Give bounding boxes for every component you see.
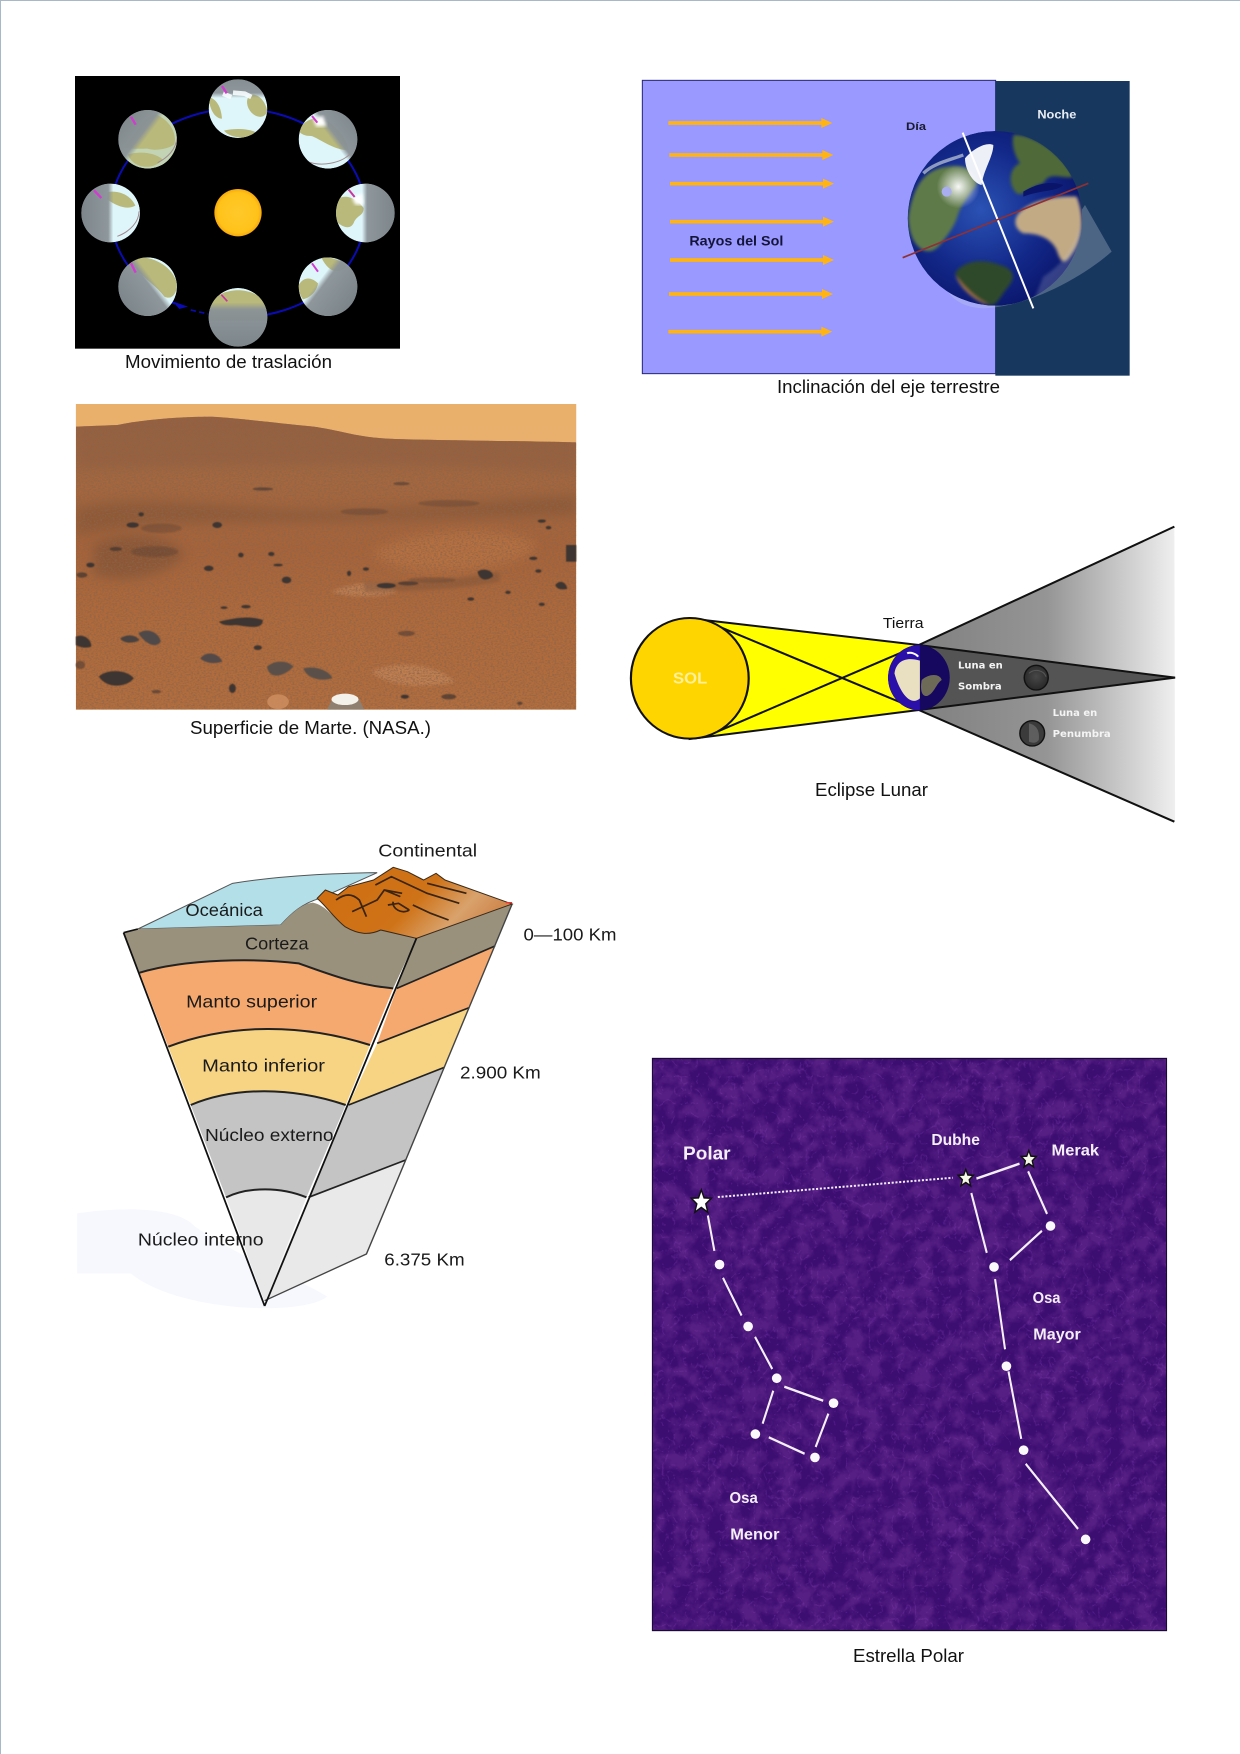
panel: inclinacion del eje terrestre: [642, 80, 1130, 397]
icon: earth: [888, 643, 953, 712]
label: polar: Polar: [683, 1142, 731, 1164]
icon: dubhe star: [958, 1169, 973, 1186]
globe left: [81, 184, 140, 242]
moon in penumbra: [1020, 721, 1045, 746]
label: corteza: Corteza: [245, 934, 309, 953]
photo: martian landscape: [76, 404, 576, 710]
icon: sun: [631, 618, 749, 739]
layer: crust: [124, 903, 416, 988]
panel: eclipse lunar: [631, 527, 1175, 822]
ocean surface: [138, 873, 377, 929]
moon in umbra: [1024, 665, 1048, 690]
label: oceanica: Oceánica: [185, 901, 263, 920]
label: merak: Merak: [1052, 1141, 1100, 1160]
label: rayos del sol: Rayos del Sol: [689, 232, 783, 248]
icon: earth globe: [908, 131, 1090, 310]
light wedge behind earth: [947, 205, 1112, 308]
label: nucleo interno: Núcleo interno: [138, 1230, 264, 1250]
label: depth 2900 km: 2.900 Km: [460, 1063, 541, 1082]
label: continental: Continental: [378, 841, 477, 861]
equator line: [903, 183, 1088, 258]
globe bottom: [208, 288, 268, 347]
star map: [652, 1058, 1167, 1631]
constellation lines: [708, 1164, 1078, 1529]
orbit diagram: [75, 61, 400, 353]
caption: movimiento de traslacion: Movimiento de traslación: [125, 352, 332, 372]
label: dubhe: Dubhe: [931, 1131, 980, 1150]
label: nucleo externo: Núcleo externo: [205, 1126, 334, 1145]
caption: superficie de marte: Superficie de Marte. (NASA.): [190, 718, 431, 738]
tilted axis: [963, 133, 1033, 308]
penumbra cone: [919, 527, 1175, 822]
labels: luna en sombra: Sombra: [958, 682, 1002, 693]
labels: luna en sombra: Luna en: [958, 661, 1003, 671]
rover part: [327, 699, 364, 710]
label: sol: SOL: [673, 670, 707, 687]
icon: sun: [214, 189, 262, 236]
eclipse diagram: [631, 527, 1175, 822]
layer: inner core: [226, 1189, 306, 1302]
sun rays arrows: [668, 118, 834, 337]
label: osa menor: Menor: [730, 1525, 780, 1544]
label: osa mayor: Osa: [1033, 1289, 1061, 1307]
stars as dots: [715, 1221, 1090, 1544]
panel: estrella polar: [652, 1058, 1167, 1666]
caption: eclipse lunar: Eclipse Lunar: [815, 780, 928, 800]
layer boundaries: [140, 960, 393, 1197]
icon: polar star: [691, 1190, 711, 1212]
label: tierra: Tierra: [883, 616, 924, 632]
umbra cone: [919, 645, 1175, 710]
label: dia: Día: [906, 121, 927, 133]
labels: luna en penumbra: Penumbra: [1053, 729, 1111, 740]
dotted pointer line: [718, 1178, 953, 1197]
label: osa menor: Osa: [730, 1489, 758, 1507]
panel: capas de la tierra: [77, 841, 616, 1308]
caption: estrella polar: Estrella Polar: [853, 1646, 964, 1666]
outer wedge lines: [124, 929, 416, 1306]
caption: inclinacion del eje: Inclinación del eje terrestre: [777, 377, 1000, 397]
light beam: [690, 618, 919, 739]
globe bottom left: [118, 257, 177, 316]
globe top left: [118, 110, 177, 169]
diagram: day and night with tilted earth: [642, 80, 1130, 376]
layer: lower mantle: [168, 1029, 370, 1105]
globe bottom right: [298, 257, 358, 316]
globe top right: [298, 110, 358, 169]
globe top: [208, 79, 268, 138]
label: osa menor: [730, 1489, 780, 1544]
labels: luna en penumbra: Luna en: [1053, 708, 1097, 719]
label: manto superior: Manto superior: [186, 992, 317, 1012]
label: osa mayor: Mayor: [1033, 1325, 1081, 1344]
rocks: [76, 482, 576, 705]
label: depth 6375 km: 6.375 Km: [384, 1250, 465, 1270]
layer: outer core: [191, 1091, 346, 1197]
right face layers: [265, 904, 512, 1301]
label: depth 0-100 km: 0—100 Km: [524, 925, 616, 945]
globe right: [336, 184, 395, 242]
labels: luna en penumbra: [1053, 708, 1111, 740]
icon: merak star: [1021, 1150, 1036, 1167]
labels: luna en sombra: [958, 661, 1003, 693]
label: manto inferior: Manto inferior: [202, 1056, 325, 1076]
panel: superficie de marte: [76, 404, 576, 738]
panel: movimiento de traslacion: [75, 61, 400, 372]
earth layers cross-section: [77, 841, 616, 1308]
label: noche: Noche: [1037, 108, 1077, 122]
layer: upper mantle: [140, 960, 393, 1047]
label: osa mayor: [1033, 1289, 1081, 1344]
continental mountains: [317, 867, 512, 938]
